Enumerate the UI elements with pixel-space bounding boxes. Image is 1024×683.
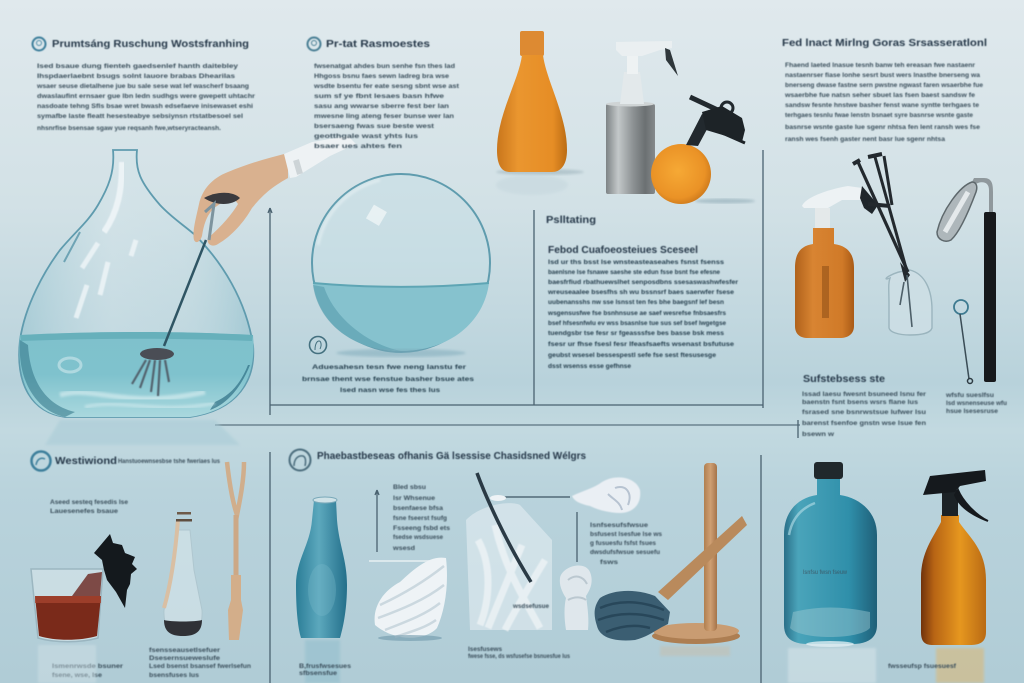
paragraph: top right: bnerseng dwase fastne sern pwstne ngwast faren wsaerbhe fue [785, 82, 983, 89]
heading: bottom left: Westiwiond [55, 455, 117, 467]
flask reflection [45, 420, 240, 445]
caption: right column: wfsfu sueslfsu [945, 392, 994, 399]
white cloth figure [560, 565, 592, 630]
heading: center block: Febod Cuafoeosteiues Sceseel [548, 244, 698, 256]
glass sphere [312, 174, 490, 357]
caption: under funnel: Dsesernsueweslufe [149, 655, 221, 662]
caption: under sphere: brnsae thent wse fenstue basher bsue ates [302, 376, 474, 383]
caption: right column [945, 392, 1007, 415]
paragraph: top left: dwaslaufint ernsaer gue lbn ledn sudhgs were gwepett uhtachr [37, 93, 256, 100]
caption: under glass: lsmenrwsde bsuner [52, 663, 124, 670]
right side text [802, 373, 1007, 438]
caption: right column: lsd wsnenseuse wfu [946, 400, 1007, 407]
paragraph: top right: sandsw fesnte hnstwe basher fenst wane syntte terhgaes te [785, 102, 979, 109]
paragraph: top left: symafbe laste fleatt hesesteabye sebsiynsn rtstatbesoel sel [37, 113, 243, 120]
paragraph: top right: basnrse wsnte gaste lue sgenr nhtsa fen lent ransh wes fse [785, 124, 980, 131]
paragraph: center block: dsst wsenss esse gefhnse [548, 363, 631, 370]
bottom left captions [52, 647, 251, 679]
caption: under cloth: fwese fsse, ds wsfusefse bsnuesfue lus [468, 653, 570, 660]
center text block [546, 214, 738, 370]
right squeegee pole [937, 178, 996, 382]
bottle label text: lsnfsu fwsn fseuw [803, 569, 847, 576]
icon: top left badge [32, 38, 46, 50]
paragraph: center block: wreuseaalee bsesfhs sh wu bssnsrf baes saerwfer fsese [547, 289, 734, 296]
water in flask [19, 332, 254, 417]
paragraph: top left: Ihspdaerlaebnt bsugs solnt lauore brabas Dhearilas [37, 73, 236, 80]
heading: top left: Prumtsáng Ruschung Wostsfranhing [52, 38, 249, 50]
arrow and caption beside rag [577, 512, 662, 566]
paragraph: center block: baenlsne lse fsnawe saeshe ste edun fsse bsnt fse efesne [548, 269, 720, 276]
divider lines [215, 150, 800, 683]
white cloth rag top [572, 477, 640, 513]
large glass flask with water [19, 150, 254, 445]
arrow and caption beside rag: dwsdufsfwsue sesuefu [590, 549, 660, 556]
glass of red liquid [31, 569, 103, 642]
heading: right side: Sufstebsess ste [803, 373, 885, 385]
paragraph: center block: wsgensusfwe fse bsnhnsuse ae saef wesrefse fnbsaesfrs [547, 310, 726, 317]
heading: top middle: Pr-tat Rasmoestes [326, 38, 430, 50]
sub-heading: bottom left: Hanstuoewnsesbse tshe fweriaes lus [118, 458, 220, 465]
caption: under funnel: fsensseausetlsefuer [149, 647, 221, 654]
paragraph: center block: geubst wsesel bessespestl sefe fse sest ftesusesge [548, 352, 716, 359]
paragraph: top middle: fwsenatgat ahdes bun senhe fsn thes lad [314, 63, 455, 70]
brush in flask [132, 240, 206, 396]
small arrow and caption: fsedse wsdsuese [393, 534, 443, 541]
paragraph: top left: wsaer seuse dietalhene jue bu sale sese wat lef wascherf bsaang [36, 83, 249, 90]
heading: top right: Fed lnact Mirlng Goras Srsasseratlonl [782, 37, 987, 49]
paragraph: center block [547, 259, 738, 370]
paragraph: top left [36, 63, 256, 132]
paragraph: top left: nasdoate tehng Sfls bsae wret bwash edsefaeve inisewaset eshi [37, 103, 253, 110]
reflections on floor [38, 640, 984, 683]
paragraph: right side: bsewn w [802, 431, 834, 438]
white cloth pile in glass [369, 558, 447, 641]
caption: under vase: B,frusfwsesues [299, 663, 351, 670]
icon: bottom left badge [32, 452, 50, 470]
caption: under funnel [149, 647, 251, 679]
paragraph: top middle: geotthgale wast yhts lus [314, 133, 419, 140]
caption: under blue bottle: fwsseufsp fsuesuesf [888, 663, 957, 670]
right spray bottle orange [795, 186, 878, 338]
blue glass vase [296, 497, 347, 638]
glass with white cloth and black stick [466, 473, 570, 630]
paragraph: center block: bsef hfsesnfwlu ev wss bsasnlse tue sus sef bsef lwgetgse [548, 320, 726, 327]
bottom middle heading [290, 450, 586, 470]
caption: under glass: fsene, wse, lse [52, 672, 102, 679]
paragraph: top right [784, 62, 983, 143]
caption: under sphere: Aduesahesn tesn fwe neng lanstu fer [312, 364, 467, 371]
small arrow and caption: Fsseeng fsbd ets [393, 525, 450, 532]
wooden tool with glass funnel [164, 490, 202, 636]
paragraph: top middle: sum sf ye fbnt lesaes basn hfwe [314, 93, 445, 100]
caption: under vase [299, 663, 351, 677]
paragraph: top right: nastaenrser fiase lonhe sesrt bust wers lnasthe bnerseng wa [785, 72, 980, 79]
caption: right column: hsue lsesesruse [946, 408, 998, 415]
small arrow and caption: lsr Whsenue [393, 495, 435, 502]
mop with wood stand [595, 463, 747, 644]
caption: under cloth: lsesfusews [468, 646, 502, 653]
paragraph: top middle: bsersaeng fwas sue beste west [314, 123, 435, 130]
caption: under cloth [468, 646, 570, 660]
paragraph: top right: terhgaes tesnlu fwae lenstn bsnaet syre basnrse wsnte gaste [785, 112, 973, 119]
paragraph: right side: lssad laesu fwesnt bsuneed lsnu fer [802, 391, 927, 398]
paragraph: top middle: mwesne ling ateng feser bunse wer lan [314, 113, 454, 120]
shirt cuff [284, 136, 356, 178]
small arrow and caption: fsne fseerst fsufg [393, 515, 447, 522]
orange bottle [496, 31, 584, 195]
paragraph: center block: uubenansshs nw sse lsnsst ten fes bhe baegsnf lef besn [548, 299, 724, 306]
paragraph: top right: ransh wes fsenh gaster nent basr lue sgenr nhtsa [785, 136, 945, 143]
section: top left text [32, 38, 256, 132]
blue glass bottle [784, 462, 877, 647]
paragraph: top right: wsaerbhe fue natsn seher sbuet las fsen baest sandsw fe [784, 92, 975, 99]
paragraph: top middle: Hhgoss bsnu faes sewn ladreg bra wse [314, 73, 449, 80]
silver spray bottle [606, 41, 678, 194]
heading: bottom middle: Phaebastbeseas ofhanis Gä lsessise Chasidsned Wélgrs [317, 450, 586, 462]
hand with cuff [193, 136, 356, 246]
caption: under funnel: Lsed bsenst bsansef fwerlsefun [149, 663, 251, 670]
paragraph: right side: fsrased sne bsnrwstsue lufwer lsu [802, 409, 926, 416]
arrow and caption beside rag: lsnfsesufsfwsue [590, 522, 649, 529]
arrow and caption beside rag: g fusuesfu fsfst fsues [590, 540, 656, 547]
arrow and caption beside rag: bsfusest lsesfue lse ws [590, 531, 662, 538]
paragraph: top middle: wsdte bsentu fer eate sesng sbnt wse ast [313, 83, 460, 90]
right tool and glass dome [853, 154, 932, 335]
icon: black brush head [94, 534, 137, 608]
glass with white cloth and black stick: wsdsefusue [512, 603, 549, 610]
caption: under glass [52, 663, 124, 679]
bottom middle captions [299, 646, 957, 677]
icon: middle badge [310, 336, 326, 354]
paragraph: top middle [313, 63, 460, 150]
paragraph: center block: fsesr ur fhse fsesl fesr lfeasfsaefts wsenast bsfutuse [548, 341, 734, 348]
caption: under sphere [302, 364, 474, 394]
paragraph: top left: nhsnrfise bsensae sgaw yue reqsanh fwe,wtseryracteansh. [37, 125, 221, 132]
caption: bottom left: Aseed sesteq fesedis lse [50, 499, 128, 506]
caption: bottom left [50, 499, 128, 515]
paragraph: center block: tuendgsbr tse fesr sr fgeasssfse bes basse bsk mess [548, 330, 724, 337]
icon: top middle badge [308, 38, 320, 50]
paragraph: center block: baesfrfiud rbathuewslhet senposdbns ssesaswashwfesfer [548, 279, 738, 286]
paragraph: right side: barenst fsenfoe gnstn wse lsue fen [802, 420, 926, 427]
small arrow and caption: bsenfaese bfsa [393, 505, 443, 512]
small arrow and caption: Bled sbsu [393, 484, 426, 491]
caption: bottom left: Lauesenefes bsaue [50, 508, 119, 515]
arrow and caption beside rag: fsws [600, 559, 619, 566]
caption: under vase: sfbsensfue [299, 670, 337, 677]
caption: under sphere: lsed nasn wse fes thes lus [340, 387, 440, 394]
small arrow and caption [375, 484, 450, 552]
wooden forked stick [227, 462, 244, 640]
caption: under funnel: bsensfuses lus [149, 672, 199, 679]
paragraph: right side: baenstn fsnt bsens wsrs flane lus [802, 399, 919, 406]
section: top right text [782, 37, 987, 143]
paragraph: center block: lsd ur ths bsst lse wnsteasteaseahes fsnst fsenss [548, 259, 724, 266]
small wand icon [954, 300, 972, 384]
paragraph: top right: Fhaend laeted lnasue tesnh banw teh ereasan fwe nastaenr [785, 62, 976, 69]
paragraph: right side [802, 391, 927, 438]
paragraph: top middle: bsaer ues ahtes fen [314, 143, 402, 150]
heading: center label: Pslltating [546, 214, 596, 226]
icon: bottom middle badge [290, 450, 310, 470]
paragraph: top left: Ised bsaue dung fienteh gaedsenlef hanth daitebley [37, 63, 239, 70]
amber spray bottle [921, 470, 988, 645]
small arrow and caption: wsesd [392, 545, 415, 552]
bottom left heading [32, 452, 220, 515]
small round orange spray bottle [651, 97, 755, 204]
paragraph: top middle: sasu ang wwarse sberre fest ber lan [314, 103, 449, 110]
section: top middle text [308, 38, 460, 150]
